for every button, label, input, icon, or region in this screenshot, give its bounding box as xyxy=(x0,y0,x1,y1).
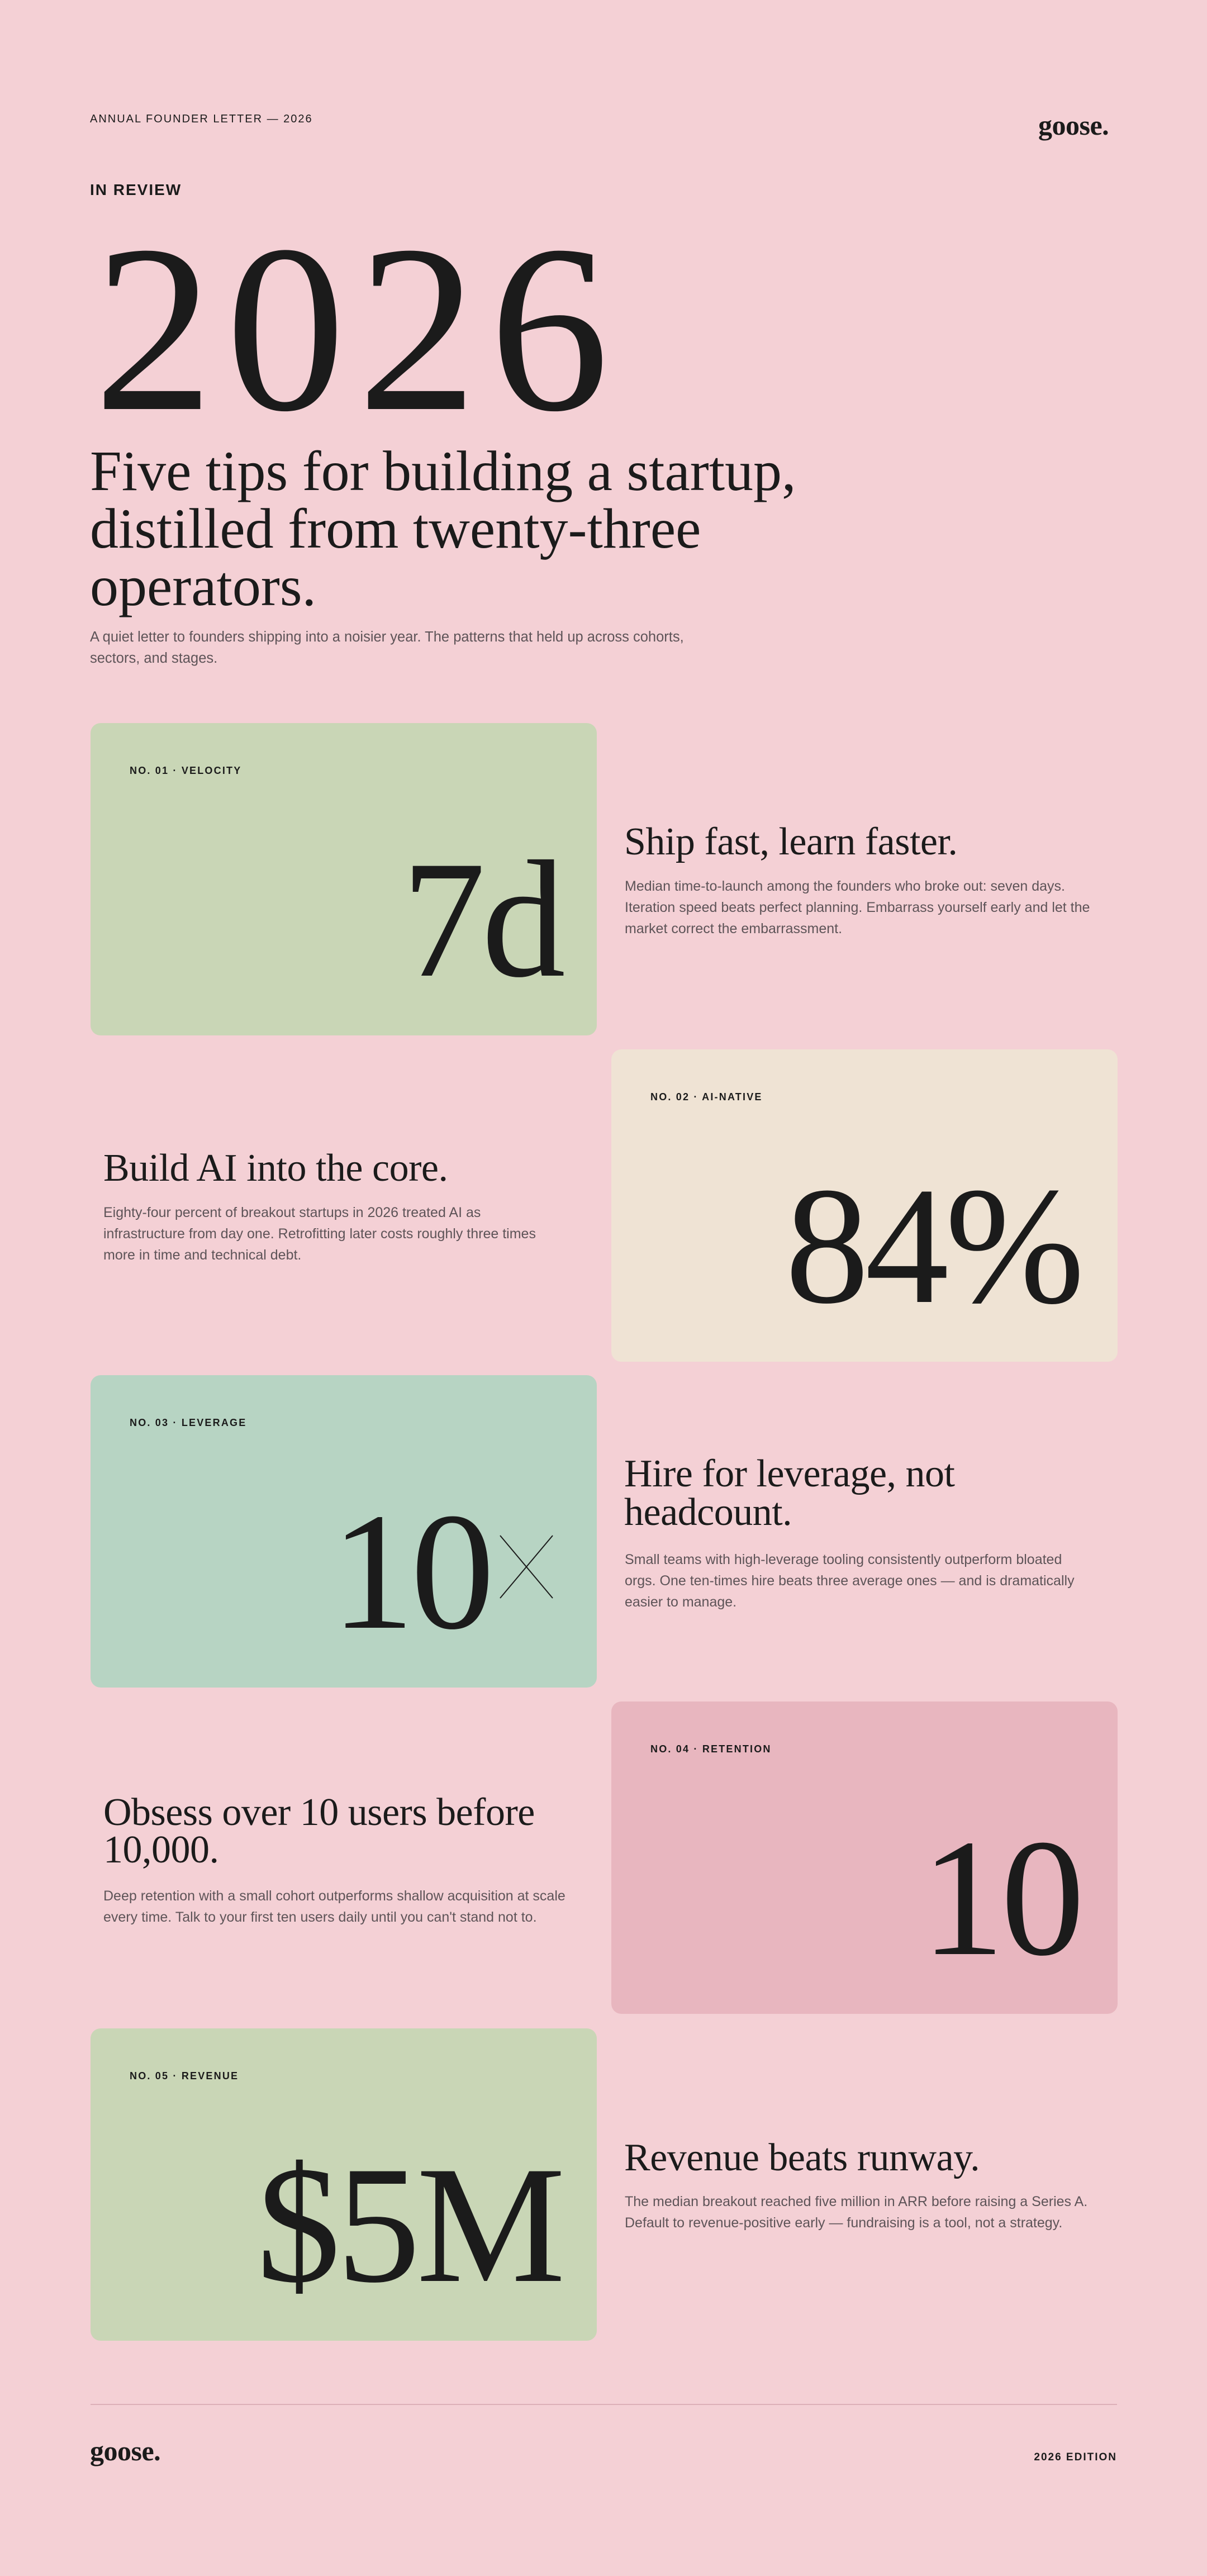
footer logo: goose. xyxy=(90,2435,160,2466)
tip 3 title: headcount. xyxy=(624,1491,792,1534)
tip 3 body: Small teams with high-leverage tooling consistently outperform bloated xyxy=(625,1552,1062,1567)
tip 4 title: 10,000. xyxy=(103,1828,219,1871)
subtitle xyxy=(90,629,684,666)
stat value: 10 xyxy=(331,1479,491,1664)
tip 1 body xyxy=(625,878,1090,937)
footer edition label: 2026 EDITION xyxy=(1034,2451,1117,2463)
panel: tip 3 leverage card xyxy=(91,1375,597,1688)
big year: 2026 xyxy=(94,196,621,461)
card label: NO. 01 · VELOCITY xyxy=(130,765,241,776)
tip 3 body xyxy=(625,1552,1075,1610)
subtitle: sectors, and stages. xyxy=(90,650,217,666)
subtitle: A quiet letter to founders shipping into a noisier year. The patterns that held up across cohorts, xyxy=(90,629,684,645)
card label: NO. 02 · AI-NATIVE xyxy=(650,1091,763,1102)
tip 4 body xyxy=(103,1888,566,1925)
stat value: 84% xyxy=(785,1153,1081,1338)
tip 5 body: The median breakout reached five million in ARR before raising a Series A. xyxy=(625,2194,1087,2209)
tip 2 body: Eighty-four percent of breakout startups in 2026 treated AI as xyxy=(103,1205,481,1220)
tip 1 body: Median time-to-launch among the founders who broke out: seven days. xyxy=(625,878,1065,894)
tip 4 title xyxy=(103,1791,535,1871)
tip 5 body xyxy=(625,2194,1087,2231)
tip 5 body: Default to revenue-positive early — fundraising is a tool, not a strategy. xyxy=(625,2215,1062,2231)
tip 4 title: Obsess over 10 users before xyxy=(103,1791,535,1834)
panel: tip 5 revenue card xyxy=(91,2028,597,2341)
tip 2 title: Build AI into the core. xyxy=(103,1147,448,1190)
tip 5 title: Revenue beats runway. xyxy=(624,2136,980,2179)
tip 2 body: more in time and technical debt. xyxy=(103,1247,301,1263)
tip 1 body: market correct the embarrassment. xyxy=(625,921,842,937)
stat value: 10 xyxy=(921,1805,1081,1990)
tip 1 body: Iteration speed beats perfect planning. Embarrass yourself early and let the xyxy=(625,900,1090,915)
tip 3 body: orgs. One ten-times hire beats three average ones — and is dramatically xyxy=(625,1573,1075,1589)
icon: thin multiplication sign xyxy=(500,1535,553,1599)
card label: NO. 04 · RETENTION xyxy=(650,1743,772,1755)
tip 3 title: Hire for leverage, not xyxy=(624,1452,954,1495)
card label: NO. 03 · LEVERAGE xyxy=(130,1417,246,1428)
tip 1 title: Ship fast, learn faster. xyxy=(624,820,957,863)
headline xyxy=(90,440,796,618)
tip 4 body: Deep retention with a small cohort outperforms shallow acquisition at scale xyxy=(103,1888,566,1904)
panel: tip 2 AI-native card xyxy=(611,1049,1118,1362)
card label: NO. 05 · REVENUE xyxy=(130,2070,239,2081)
stat value: $5M xyxy=(256,2132,562,2317)
tip 4 body: every time. Talk to your first ten users daily until you can't stand not to. xyxy=(103,1909,537,1925)
tip 3 title xyxy=(624,1452,955,1534)
stat value: 7d xyxy=(402,826,562,1012)
headline: distilled from twenty-three xyxy=(90,497,701,560)
tip 2 body xyxy=(103,1205,536,1263)
headline: operators. xyxy=(90,555,316,618)
header label: ANNUAL FOUNDER LETTER — 2026 xyxy=(90,113,313,125)
tip 3 body: easier to manage. xyxy=(625,1594,736,1610)
panel: tip 4 retention card xyxy=(611,1702,1118,2014)
kicker: in review: IN REVIEW xyxy=(90,181,182,198)
tip 2 body: infrastructure from day one. Retrofitting later costs roughly three times xyxy=(103,1226,536,1242)
panel: tip 1 velocity card xyxy=(91,723,597,1035)
logo: goose: goose. xyxy=(1038,110,1109,141)
headline: Five tips for building a startup, xyxy=(90,440,796,503)
